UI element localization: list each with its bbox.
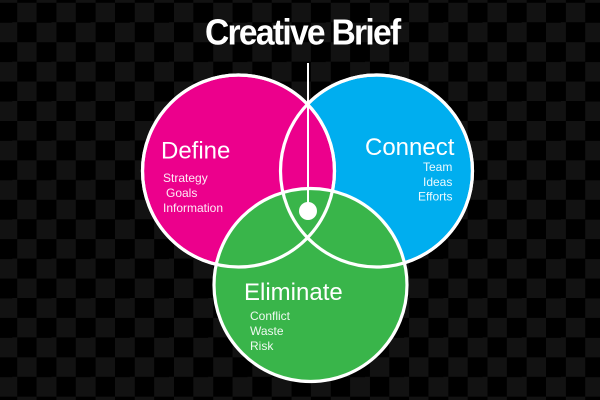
label: eliminate: [244, 279, 343, 353]
label: eliminate: Waste: [250, 324, 284, 338]
label: define: [161, 138, 230, 215]
label: connect: Efforts: [418, 190, 452, 204]
overlap outlines: [142, 75, 472, 267]
label: connect: Team: [423, 160, 452, 174]
label: connect: Connect: [365, 134, 455, 161]
label: connect: Ideas: [423, 175, 452, 189]
label: eliminate: Eliminate: [244, 279, 343, 306]
label: eliminate: Risk: [250, 339, 274, 353]
label: define: Strategy: [163, 171, 208, 185]
label: define: Define: [161, 138, 230, 164]
pointer line: [307, 63, 309, 210]
circle: connect (blue): [280, 75, 472, 267]
center dot: [299, 202, 317, 220]
circle: define (magenta): [142, 75, 334, 267]
label: define: Information: [163, 201, 223, 215]
label: eliminate: Conflict: [250, 309, 291, 323]
circle: eliminate (green): [214, 188, 407, 382]
label: define: Goals: [166, 186, 197, 200]
label: connect: [365, 134, 455, 204]
title: Creative Brief: [205, 12, 402, 53]
